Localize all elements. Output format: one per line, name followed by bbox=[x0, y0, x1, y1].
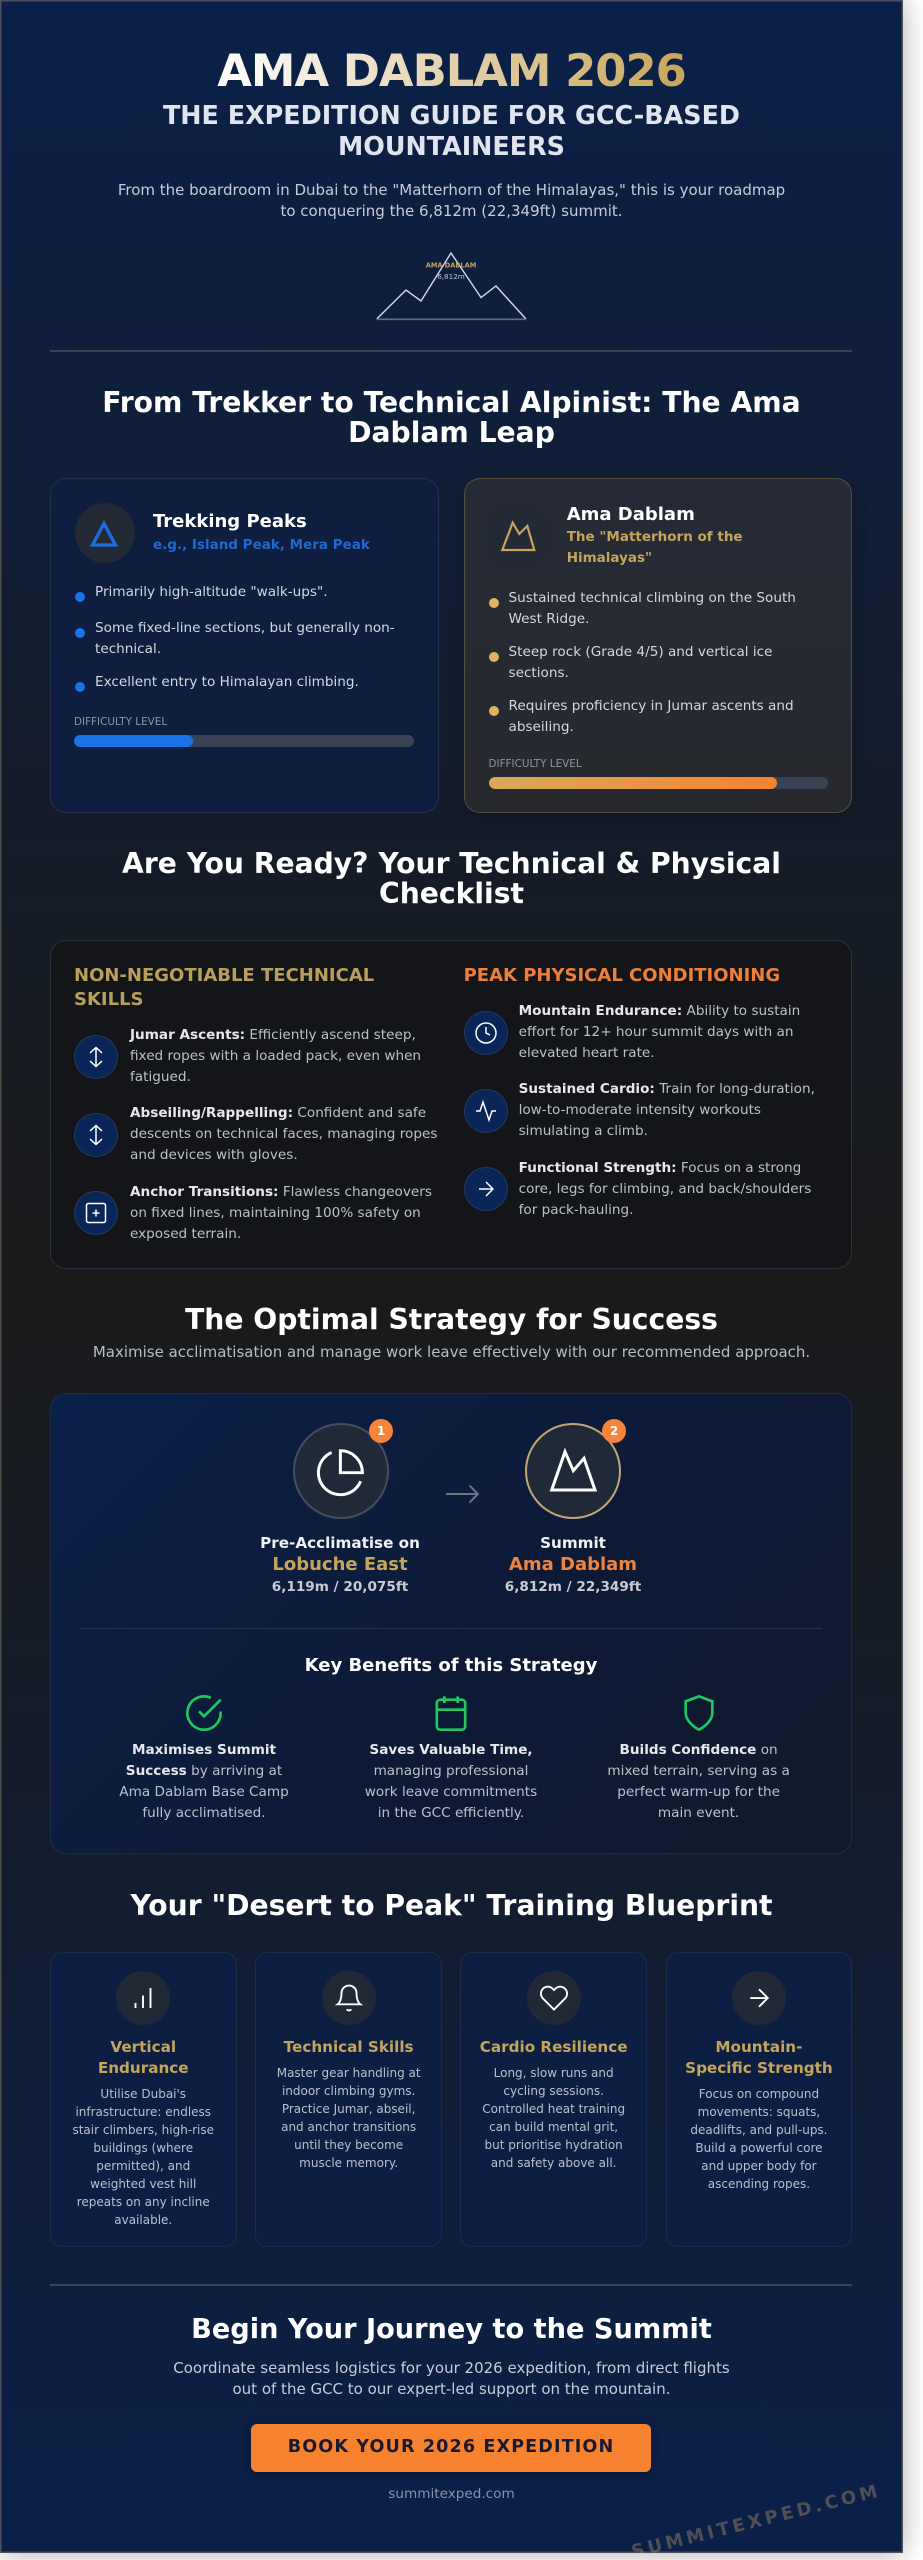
card text: repeats on any incline bbox=[77, 2195, 210, 2209]
benefit: summit success bbox=[119, 1742, 289, 1821]
icon: abseil bbox=[74, 1113, 118, 1157]
icon: anchor bbox=[74, 1191, 118, 1235]
card title: Mountain- bbox=[715, 2038, 802, 2056]
step 1 text: Pre-Acclimatise on bbox=[260, 1534, 420, 1552]
card text: permitted), and bbox=[96, 2159, 190, 2173]
card title bbox=[685, 2038, 833, 2077]
benefit: saves time bbox=[365, 1742, 537, 1821]
card text: weighted vest hill bbox=[90, 2177, 196, 2191]
difficulty label: DIFFICULTY LEVEL bbox=[488, 758, 582, 770]
badge 2 bbox=[602, 1419, 626, 1443]
card subtitle bbox=[566, 529, 743, 566]
card text: Long, slow runs and bbox=[494, 2066, 614, 2080]
card text: but prioritise hydration bbox=[484, 2138, 623, 2152]
text: jumar: Jumar Ascents: Efficiently ascend steep, bbox=[130, 1026, 416, 1042]
text: cardio: simulating a climb. bbox=[519, 1123, 648, 1139]
card text: deadlifts, and pull-ups. bbox=[690, 2123, 828, 2137]
card text: movements: squats, bbox=[698, 2105, 820, 2119]
benefit: confidence bbox=[607, 1742, 790, 1821]
text: jumar bbox=[129, 1026, 421, 1084]
call to action text: Coordinate seamless logistics for your 2026 expedition, from direct flights bbox=[173, 2359, 730, 2377]
intro text: to conquering the 6,812m (22,349ft) summit. bbox=[280, 202, 623, 220]
benefit: saves time: in the GCC efficiently. bbox=[378, 1805, 524, 1821]
text: anchor bbox=[130, 1184, 432, 1242]
icon: jumar bbox=[74, 1035, 118, 1079]
icon: check bbox=[186, 1694, 222, 1731]
card text: stair climbers, high-rise bbox=[72, 2123, 214, 2137]
column heading: technical skills bbox=[74, 965, 374, 1010]
text: abseil: and devices with gloves. bbox=[130, 1147, 298, 1163]
bullet list: Some fixed-line sections, but generally non- bbox=[95, 620, 395, 636]
bullet list: technical. bbox=[95, 640, 161, 656]
subtitle bbox=[163, 100, 740, 160]
key benefits heading: Key Benefits of this Strategy bbox=[305, 1654, 597, 1676]
card title: Specific Strength bbox=[685, 2059, 833, 2077]
card subtitle: e.g., Island Peak, Mera Peak bbox=[153, 536, 370, 552]
benefit: summit success: Maximises Summit bbox=[132, 1742, 276, 1758]
step 2 text: Summit bbox=[540, 1534, 606, 1552]
text: endurance bbox=[519, 1003, 800, 1061]
card text: and anchor transitions bbox=[281, 2120, 416, 2134]
bullet list: Requires proficiency in Jumar ascents and bbox=[508, 698, 794, 714]
column heading: technical skills: NON-NEGOTIABLE TECHNICAL bbox=[74, 965, 374, 986]
subtitle: MOUNTAINEERS bbox=[338, 130, 565, 160]
text: anchor: Anchor Transitions: Flawless changeovers bbox=[130, 1184, 432, 1200]
heading: checklist: Are You Ready? Your Technical & Physical bbox=[122, 846, 781, 880]
bullet list: Steep rock (Grade 4/5) and vertical ice bbox=[508, 644, 772, 660]
icon: pulse bbox=[464, 1089, 508, 1133]
call to action text bbox=[173, 2359, 730, 2398]
icon: mountain illustration bbox=[376, 252, 526, 320]
benefit: confidence: mixed terrain, serving as a bbox=[607, 1763, 790, 1779]
text: strength: for pack-hauling. bbox=[519, 1202, 634, 1218]
bullet list: Primarily high-altitude "walk-ups". bbox=[95, 584, 328, 600]
panel: vertical endurance bbox=[50, 1952, 236, 2247]
text: abseil: Abseiling/Rappelling: Confident and safe bbox=[130, 1105, 426, 1121]
benefit: saves time: Saves Valuable Time, bbox=[369, 1742, 533, 1758]
text: strength: Functional Strength: Focus on a strong bbox=[519, 1160, 801, 1176]
card text: buildings (where bbox=[93, 2141, 193, 2155]
card text: Master gear handling at bbox=[277, 2066, 421, 2080]
bullet list bbox=[75, 584, 395, 692]
text: anchor: on fixed lines, maintaining 100% safety on bbox=[130, 1204, 421, 1220]
card subtitle: The "Matterhorn of the bbox=[567, 529, 743, 545]
card text: can build mental grit, bbox=[489, 2120, 618, 2134]
text: abseil bbox=[130, 1105, 437, 1163]
heading: call to action: Begin Your Journey to the Summit bbox=[191, 2314, 712, 2345]
text: endurance: effort for 12+ hour summit days with an bbox=[519, 1024, 793, 1040]
difficulty bar bbox=[74, 735, 414, 747]
column heading: physical conditioning: PEAK PHYSICAL CONDITIONING bbox=[464, 965, 780, 986]
card text: Practice Jumar, abseil, bbox=[282, 2102, 415, 2116]
benefit: confidence: main event. bbox=[658, 1805, 739, 1821]
heading: trekker to alpinist: Dablam Leap bbox=[348, 416, 555, 449]
heading: trekker to alpinist: From Trekker to Technical Alpinist: The Ama bbox=[102, 386, 801, 418]
card text: ascending ropes. bbox=[708, 2177, 810, 2191]
text: cardio: Sustained Cardio: Train for long-duration, bbox=[519, 1081, 815, 1097]
panel: checklist bbox=[50, 940, 852, 1269]
step 2 text bbox=[505, 1534, 641, 1595]
heading: checklist bbox=[122, 846, 781, 910]
text: endurance: elevated heart rate. bbox=[519, 1045, 655, 1061]
bullet list: Sustained technical climbing on the South bbox=[508, 590, 796, 606]
benefit: confidence: perfect warm-up for the bbox=[617, 1784, 780, 1800]
benefit: confidence: Builds Confidence on bbox=[620, 1742, 778, 1758]
card title: Cardio Resilience bbox=[480, 2038, 628, 2056]
card text bbox=[72, 2087, 214, 2227]
text: cardio bbox=[519, 1081, 815, 1139]
icon: triangle bbox=[75, 503, 135, 563]
icon: mountain bbox=[488, 506, 548, 566]
card text bbox=[277, 2066, 421, 2170]
icon: arrow bbox=[732, 1971, 786, 2025]
step 1 text: 6,119m / 20,075ft bbox=[272, 1579, 408, 1595]
heading: training blueprint: Your "Desert to Peak" Training Blueprint bbox=[130, 1889, 773, 1922]
benefit: saves time: managing professional bbox=[374, 1763, 528, 1779]
heading: trekker to alpinist bbox=[102, 386, 801, 449]
card title: Ama Dablam bbox=[567, 504, 695, 525]
difficulty label: DIFFICULTY LEVEL bbox=[74, 716, 167, 728]
step 1 circle with pie icon bbox=[293, 1423, 389, 1519]
bullet list: West Ridge. bbox=[508, 610, 589, 626]
step 2 circle with mountain icon bbox=[525, 1423, 621, 1519]
badge 1 bbox=[369, 1419, 393, 1443]
text: cardio: low-to-moderate intensity workouts bbox=[519, 1102, 761, 1118]
button: BOOK YOUR 2026 EXPEDITION bbox=[288, 2437, 614, 2457]
badge 2: 2 bbox=[610, 1424, 618, 1438]
intro text bbox=[118, 180, 785, 220]
panel: mountain strength bbox=[666, 1952, 852, 2247]
card subtitle: Himalayas" bbox=[567, 550, 652, 566]
title: AMA DABLAM 2026 bbox=[217, 44, 686, 97]
card title: Endurance bbox=[98, 2059, 189, 2077]
icon: calendar bbox=[436, 1696, 466, 1731]
text: jumar: fixed ropes with a loaded pack, even when bbox=[130, 1048, 421, 1064]
benefit: summit success: Ama Dablam Base Camp bbox=[119, 1784, 289, 1800]
column heading: technical skills: SKILLS bbox=[74, 989, 144, 1010]
arrow bbox=[446, 1484, 480, 1504]
text: jumar: fatigued. bbox=[130, 1068, 191, 1084]
step 2 text: 6,812m / 22,349ft bbox=[505, 1579, 641, 1595]
card text: Focus on compound bbox=[699, 2087, 819, 2101]
icon: bell bbox=[322, 1971, 376, 2025]
badge 1: 1 bbox=[377, 1424, 385, 1438]
intro text: From the boardroom in Dubai to the "Matterhorn of the Himalayas," this is your roadmap bbox=[118, 180, 785, 198]
icon: mountain illustration: AMA DABLAM bbox=[426, 262, 476, 270]
panel: technical skills bbox=[255, 1952, 442, 2247]
subtitle: THE EXPEDITION GUIDE FOR GCC-BASED bbox=[163, 100, 740, 130]
card text: infrastructure: endless bbox=[75, 2105, 211, 2119]
card text bbox=[690, 2087, 828, 2191]
icon: shield bbox=[684, 1694, 714, 1732]
text: anchor: exposed terrain. bbox=[130, 1226, 241, 1242]
icon: arrow bbox=[464, 1167, 508, 1211]
call to action text: out of the GCC to our expert-led support on the mountain. bbox=[232, 2380, 670, 2398]
text: strength bbox=[518, 1160, 811, 1218]
bullet list: sections. bbox=[508, 664, 569, 680]
panel: trekking peaks bbox=[50, 478, 439, 813]
website: summitexped.com bbox=[388, 2486, 515, 2502]
heading: strategy: The Optimal Strategy for Success bbox=[185, 1303, 718, 1336]
card text: Controlled heat training bbox=[482, 2102, 625, 2116]
card text: Build a powerful core bbox=[695, 2141, 823, 2155]
strategy subtitle: Maximise acclimatisation and manage work leave effectively with our recommended approach. bbox=[93, 1343, 810, 1361]
text: strength: core, legs for climbing, and back/shoulders bbox=[519, 1180, 811, 1196]
panel: cardio resilience bbox=[460, 1952, 647, 2247]
card text: cycling sessions. bbox=[503, 2084, 604, 2098]
benefit: summit success: Success by arriving at bbox=[126, 1763, 282, 1779]
step 2 text: Ama Dablam bbox=[509, 1554, 637, 1575]
difficulty bar bbox=[488, 777, 828, 789]
text: endurance: Mountain Endurance: Ability to sustain bbox=[519, 1003, 800, 1019]
benefit: saves time: work leave commitments bbox=[365, 1784, 537, 1800]
benefit: summit success: fully acclimatised. bbox=[142, 1805, 266, 1821]
card text: indoor climbing gyms. bbox=[282, 2084, 415, 2098]
card text: available. bbox=[114, 2213, 172, 2227]
card text bbox=[482, 2066, 625, 2170]
card text: and upper body for bbox=[701, 2159, 817, 2173]
card text: muscle memory. bbox=[299, 2156, 398, 2170]
button bbox=[251, 2424, 651, 2472]
card title: Technical Skills bbox=[284, 2038, 414, 2056]
icon: bars bbox=[116, 1971, 170, 2025]
card text: and safety above all. bbox=[491, 2156, 616, 2170]
card title: Vertical bbox=[110, 2038, 176, 2056]
panel: strategy bbox=[50, 1393, 852, 1854]
card text: until they become bbox=[294, 2138, 403, 2152]
bullet list: abseiling. bbox=[508, 719, 574, 735]
icon: clock bbox=[464, 1011, 508, 1055]
panel: ama dablam bbox=[464, 478, 852, 813]
card title: Trekking Peaks bbox=[153, 511, 307, 532]
step 1 text: Lobuche East bbox=[272, 1554, 408, 1575]
bullet list: Excellent entry to Himalayan climbing. bbox=[95, 674, 359, 690]
card text: Utilise Dubai's bbox=[100, 2087, 186, 2101]
heading: checklist: Checklist bbox=[379, 877, 524, 910]
bullet list bbox=[489, 590, 796, 735]
icon: mountain illustration: 6,812m bbox=[437, 272, 465, 281]
text: abseil: descents on technical faces, managing ropes bbox=[130, 1126, 437, 1142]
step 1 text bbox=[260, 1534, 420, 1595]
icon: heart bbox=[527, 1971, 581, 2025]
card title bbox=[98, 2038, 189, 2077]
